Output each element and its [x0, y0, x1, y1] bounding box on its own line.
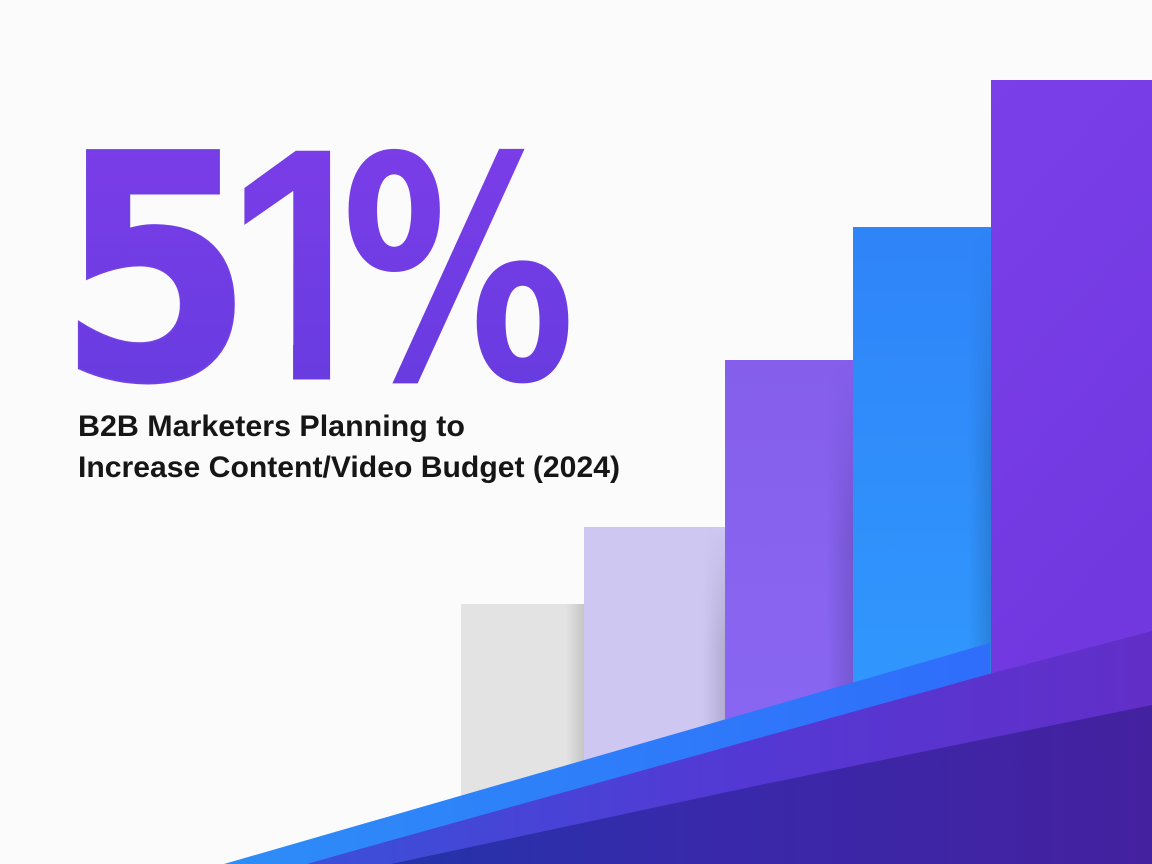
bar 1: light gray — [461, 604, 584, 804]
wedge: purple swoosh — [306, 631, 1152, 864]
bar chart: rising bars — [461, 80, 1152, 804]
wedge: blue swoosh — [224, 643, 990, 864]
bar 2: lavender — [584, 527, 725, 767]
wedge: dark indigo swoosh — [391, 705, 1152, 864]
subtitle: Increase Content/Video Budget (2024) — [78, 451, 620, 484]
big statistic: 51%: 1 — [225, 80, 389, 450]
big statistic: 51%: 5 — [57, 89, 254, 454]
subtitle: B2B Marketers Planning to — [78, 410, 465, 443]
bar 4: blue — [853, 227, 991, 687]
bar 3: medium purple — [725, 360, 853, 725]
big statistic: 51% — [78, 148, 568, 384]
subtitle — [78, 410, 620, 484]
bar 5: violet — [991, 80, 1152, 680]
big statistic: 51%: % — [341, 91, 576, 452]
